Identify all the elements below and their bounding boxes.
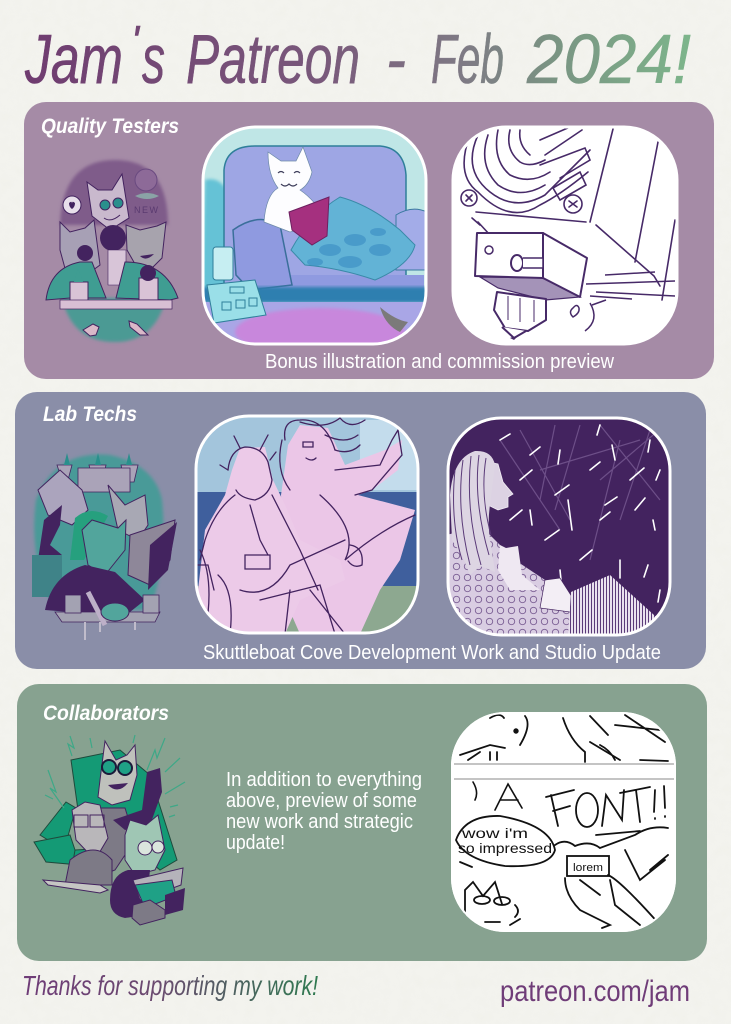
flower sign: [135, 169, 157, 191]
image: woman watching rain, dark purple: [447, 417, 671, 636]
image: marker sketch "A FONT!!": wow i'm: [461, 825, 528, 841]
image frame: [453, 127, 677, 344]
right cat: [126, 222, 166, 270]
woman: [281, 425, 415, 634]
image frame: [203, 127, 426, 344]
coat: [450, 534, 570, 634]
cat: [264, 147, 328, 232]
image: laser nozzle line art: [452, 126, 678, 345]
heading: quality testers: Quality Testers: [41, 115, 179, 138]
top cat: [98, 741, 137, 805]
title: s: [142, 20, 165, 98]
top cat: [87, 174, 129, 230]
body text: above, preview of some: [226, 790, 417, 812]
rug: [202, 287, 427, 303]
title: 2024!: [526, 20, 691, 98]
image: marker sketch "A FONT!!": so impressed: [458, 840, 552, 856]
face in profile: [488, 462, 513, 510]
panel: quality testers: [24, 102, 714, 379]
illustration: collaborator cats with screens: [34, 735, 185, 925]
caption: bonus illustration: Bonus illustration and commission preview: [265, 351, 615, 373]
title: Patreon: [186, 20, 360, 98]
right cat: [125, 815, 165, 875]
body text: [226, 769, 422, 854]
image frame: [196, 416, 418, 633]
footer: patreon url: patreon.com/jam: [500, 975, 690, 1008]
body text: new work and strategic: [226, 811, 413, 833]
title: Jam: [24, 20, 123, 98]
heading: collaborators: Collaborators: [43, 702, 169, 725]
footer: thanks: Thanks for supporting my work!: [22, 970, 318, 1001]
image: marker sketch "A FONT!!": [451, 712, 676, 932]
image frame: [448, 418, 670, 635]
image frame: [452, 713, 675, 931]
illustration: lab tech cats: [32, 453, 177, 640]
man: [198, 447, 292, 632]
title: -: [386, 20, 406, 98]
panel: lab techs: [15, 392, 706, 669]
image: marker sketch "A FONT!!": lorem: [573, 862, 603, 874]
title: [24, 17, 691, 98]
left cat: [72, 802, 108, 860]
panel: collaborators: [17, 684, 707, 961]
image: couple cycling, pink sketch: [195, 415, 419, 634]
caption: skuttleboat: Skuttleboat Cove Development Work and Studio Update: [203, 642, 661, 664]
hair: [450, 451, 495, 575]
cat: [498, 545, 540, 590]
heart bubble: [63, 196, 81, 214]
illustration: three cats with plants: [46, 160, 178, 342]
image: cat reading on sofa: [202, 126, 427, 356]
lab coats: [46, 262, 106, 300]
illustration: three cats with plants: NEW: [134, 205, 158, 215]
body text: In addition to everything: [226, 769, 422, 791]
title: ': [131, 17, 141, 66]
title: Feb: [431, 20, 504, 98]
body text: update!: [226, 832, 285, 854]
heading: lab techs: Lab Techs: [43, 403, 137, 426]
left cat: [60, 220, 100, 276]
